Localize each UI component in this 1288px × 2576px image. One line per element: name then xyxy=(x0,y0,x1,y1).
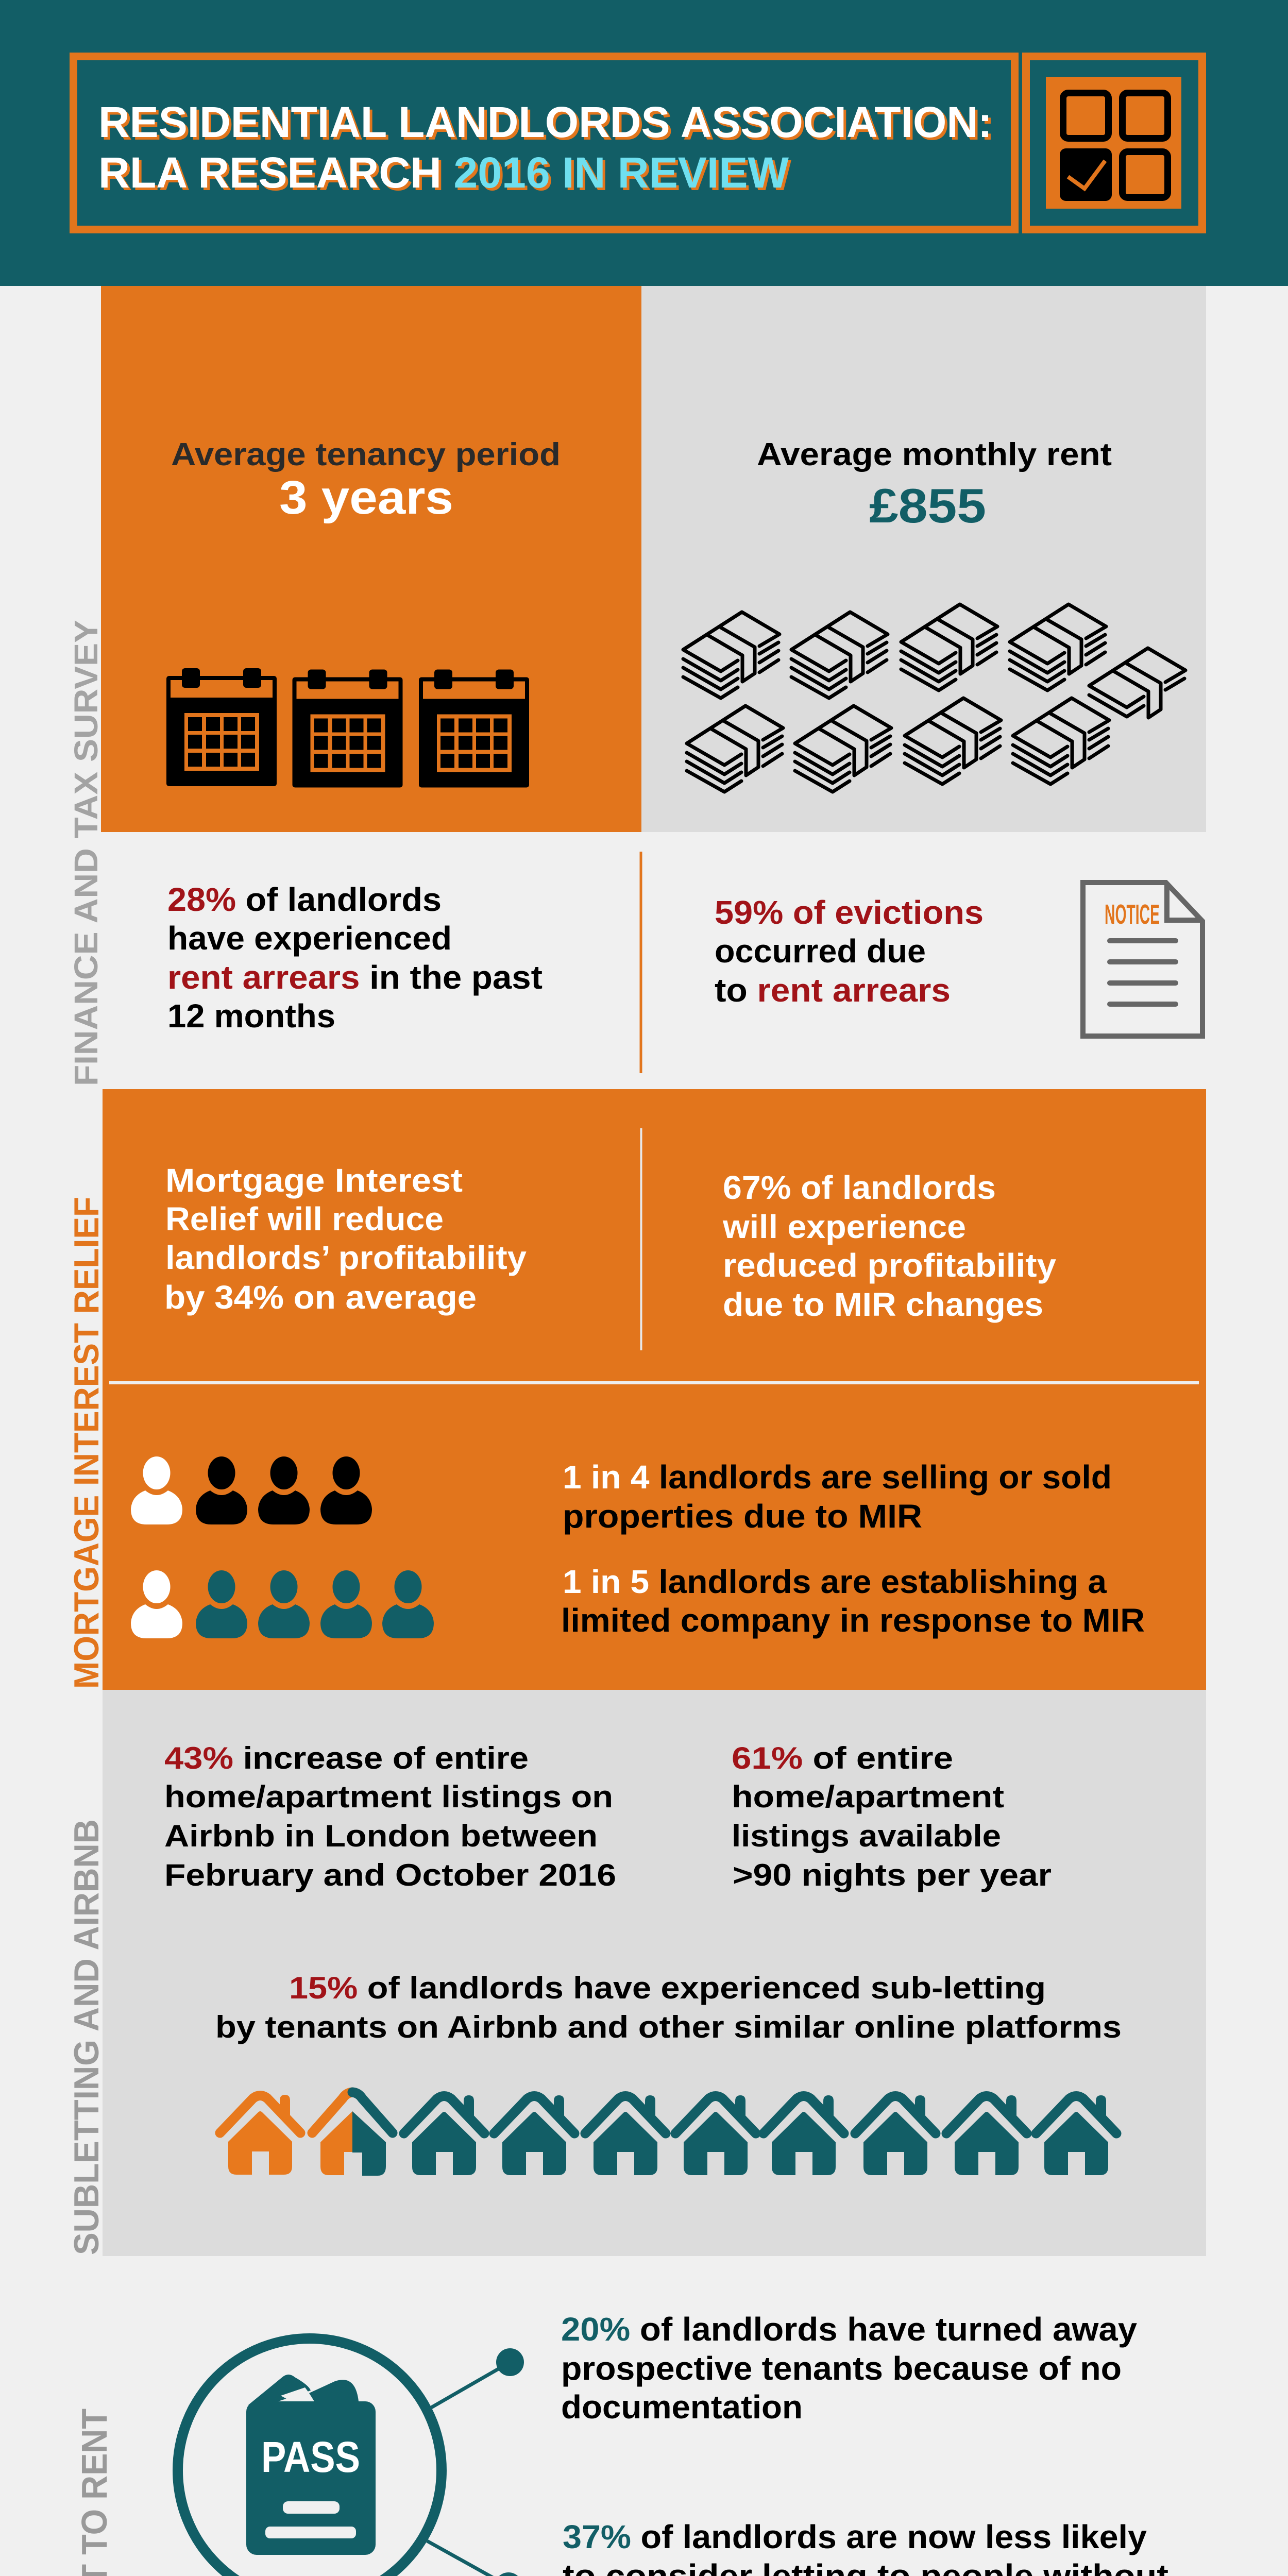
tenancy value: 3 years xyxy=(279,471,453,524)
text: profitability reduction: Mortgage Interest xyxy=(165,1162,463,1199)
title: RLA RESEARCH 2016 IN REVIEW xyxy=(98,148,789,197)
text: 59% of evictions xyxy=(715,894,984,1009)
text: 28% rent arrears: have experienced xyxy=(167,920,452,957)
text: 67% of landlords: due to MIR changes xyxy=(723,1286,1043,1323)
text: profitability reduction: by 34% on average xyxy=(164,1279,477,1316)
text: 59% of evictions: occurred due xyxy=(715,933,926,970)
text: 1 in 5 landlords: limited company in response to MIR xyxy=(561,1602,1145,1639)
text: 67% of landlords: 67% of landlords xyxy=(723,1169,996,1206)
text: 43% increase xyxy=(164,1741,616,1892)
header banner xyxy=(0,0,1288,286)
icon: people 1 in 5 xyxy=(131,1570,434,1638)
text: 28% rent arrears: rent arrears in the past xyxy=(167,959,543,996)
text: 15% sub-letting: 15% of landlords have experienced sub-letting xyxy=(289,1971,1046,2005)
icon: three calendars xyxy=(166,668,529,787)
text: 61% of listings: >90 nights per year xyxy=(733,1858,1052,1892)
section label: subletting and airbnb: SUBLETTING AND AIRBNB xyxy=(67,1819,106,2255)
panel: mortgage interest relief xyxy=(103,1089,1206,1690)
text: 1 in 5 landlords: 1 in 5 landlords are establishing a xyxy=(563,1563,1107,1600)
text: 20% turned away: 20% of landlords have turned away xyxy=(561,2311,1137,2348)
title xyxy=(98,98,992,197)
icon: passport in circle with connectors: PASS xyxy=(261,2433,360,2481)
text: 59% of evictions: to rent arrears xyxy=(715,972,951,1009)
rent value: £855 xyxy=(869,479,986,533)
text: profitability reduction: landlords’ profitability xyxy=(165,1239,527,1276)
tenancy heading: Average tenancy period xyxy=(171,437,561,472)
rent heading: Average monthly rent xyxy=(757,437,1112,472)
text: 43% increase: February and October 2016 xyxy=(164,1858,616,1892)
text: 43% increase: 43% increase of entire xyxy=(164,1741,529,1775)
text: 61% of listings xyxy=(732,1741,1052,1892)
text: 61% of listings: 61% of entire xyxy=(732,1741,953,1775)
text: 43% increase: Airbnb in London between xyxy=(164,1819,598,1853)
text: 1 in 4 landlords: 1 in 4 landlords are selling or sold xyxy=(563,1459,1112,1496)
section label: finance and tax survey: FINANCE AND TAX SURVEY xyxy=(67,620,105,1086)
text: 1 in 4 landlords xyxy=(563,1459,1112,1535)
text: 37% less likely: 37% of landlords are now less likely xyxy=(563,2518,1147,2555)
text: 43% increase: home/apartment listings on xyxy=(164,1780,613,1814)
header title frame xyxy=(73,57,1015,230)
section label: mortgage interest relief: MORTGAGE INTEREST RELIEF xyxy=(67,1197,106,1689)
text: 37% less likely xyxy=(563,2518,1168,2576)
text: 61% of listings: listings available xyxy=(732,1819,1001,1853)
icon: passport in circle with connectors xyxy=(178,2338,524,2576)
text: 20% turned away: documentation xyxy=(561,2388,803,2426)
text: 67% of landlords: will experience xyxy=(722,1208,966,1245)
text: 28% rent arrears: 12 months xyxy=(167,997,335,1035)
panel: average monthly rent xyxy=(641,286,1206,832)
title: RESIDENTIAL LANDLORDS ASSOCIATION: xyxy=(98,98,992,146)
text: profitability reduction xyxy=(164,1162,527,1316)
icon: notice document: NOTICE xyxy=(1105,899,1160,930)
panel: subletting and airbnb xyxy=(103,1690,1206,2256)
text: 61% of listings: home/apartment xyxy=(732,1780,1004,1814)
header icon frame xyxy=(1026,57,1202,230)
text: 28% rent arrears: 28% of landlords xyxy=(167,881,442,918)
text: 15% sub-letting xyxy=(215,1971,1122,2044)
text: 67% of landlords xyxy=(722,1169,1056,1323)
icon: people 1 in 4 xyxy=(131,1456,372,1524)
text: 20% turned away xyxy=(561,2311,1137,2426)
icon: checklist xyxy=(1046,77,1181,209)
panel: average tenancy period xyxy=(101,286,641,832)
text: 59% of evictions: 59% of evictions xyxy=(715,894,984,931)
text: 67% of landlords: reduced profitability xyxy=(723,1247,1056,1284)
text: 15% sub-letting: by tenants on Airbnb and other similar online platforms xyxy=(215,2010,1122,2044)
text: 28% rent arrears xyxy=(167,881,543,1035)
icon: notice document xyxy=(1083,883,1202,1036)
text: profitability reduction: Relief will reduce xyxy=(165,1200,444,1238)
text: 20% turned away: prospective tenants because of no xyxy=(561,2350,1122,2387)
text: 1 in 5 landlords xyxy=(561,1563,1145,1639)
text: 1 in 4 landlords: properties due to MIR xyxy=(563,1498,922,1535)
icon: money stacks xyxy=(683,604,1185,792)
icon: row of houses xyxy=(220,2092,1116,2176)
